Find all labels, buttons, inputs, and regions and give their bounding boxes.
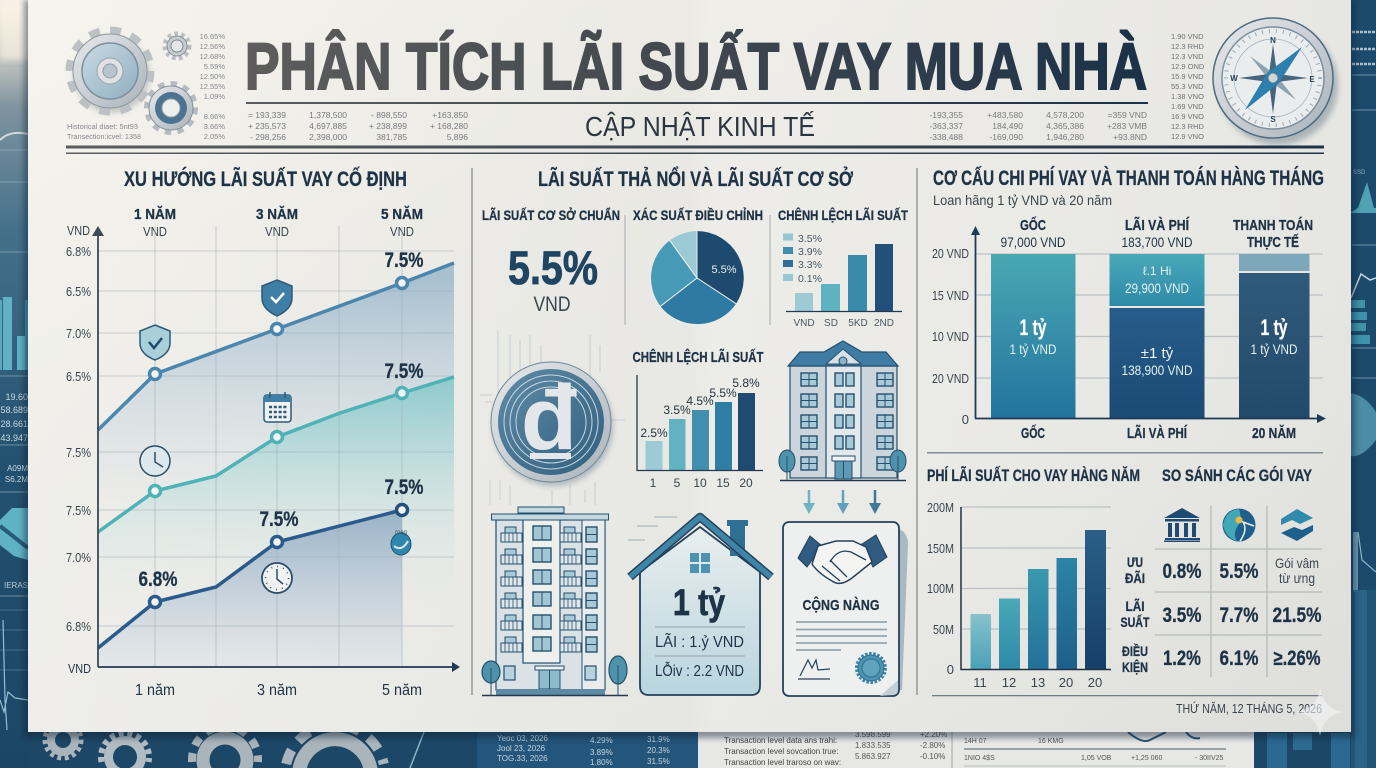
icon: shield dark (262, 280, 292, 316)
bottom strip: paper table: Transaction level traroso on wav: (724, 758, 841, 767)
values: ≥.26% (1274, 647, 1321, 670)
bar chart: 150M (927, 541, 954, 556)
right number table: 184,490 (992, 121, 1023, 131)
mini bar chart with legend: 3.9% (798, 246, 822, 258)
data labels: 6.8% (138, 568, 178, 591)
data labels: 7.5% (384, 476, 424, 499)
left number table: + 235,573 (248, 121, 286, 131)
bottom strip: paper table: 1,05 VOB (1081, 755, 1112, 762)
y axis labels: VND (68, 661, 91, 676)
panel: fixed rate trends (66, 167, 460, 699)
bottom strip: paper table: 1.833.535 (855, 741, 891, 750)
right strip decoration: SSD (1353, 170, 1366, 176)
left number table: 2,398,000 (309, 132, 347, 142)
panel: loan package comparison (1120, 466, 1322, 677)
bottom strip: paper table (698, 730, 1350, 768)
right number table: -193,355 (929, 110, 963, 120)
icon: clock (262, 563, 292, 593)
icon: compass: E (1309, 75, 1315, 84)
icon: handshake (798, 535, 887, 583)
bar chart: rate spread: 1 (650, 476, 657, 490)
bar chart: 200M (927, 500, 954, 515)
mini bar chart with legend: CHÊNH LỆCH LÃI SUẤT (778, 206, 908, 223)
stacked bar chart: GỐC (1021, 424, 1045, 442)
icon: S logo (1281, 509, 1313, 541)
bottom strip: dark table: 31.9% (647, 735, 670, 744)
values: từ ưng (1279, 570, 1315, 586)
row labels: KIỆN (1122, 658, 1148, 675)
bar chart: 12 (1002, 675, 1016, 690)
left number table: - 298,256 (250, 132, 286, 142)
left number table: - 898,550 (371, 110, 407, 120)
bottom strip: dark table: 4.29% (590, 736, 613, 745)
bar chart: rate spread: 4.5% (686, 394, 714, 408)
panel: loan cost structure (927, 167, 1326, 453)
row labels (1120, 554, 1150, 675)
values: 21.5% (1272, 604, 1322, 627)
stacked bar chart: LÃI VÀ PHÍ (1127, 424, 1188, 442)
term headers: 5 NĂM (381, 206, 423, 223)
stacked bar chart: 29,900 VND (1125, 280, 1189, 296)
row labels: SUẤT (1120, 614, 1150, 630)
y axis labels: 7.0% (66, 550, 91, 565)
bar chart: 11 (973, 675, 987, 690)
icon: house card: LỖiv : 2.2 VND (655, 662, 744, 680)
y axis labels: 7.5% (66, 445, 91, 460)
left mini statistics: 3.66% (204, 122, 225, 131)
base rate: VND (534, 293, 570, 316)
bottom strip: paper table: 5.863.927 (855, 752, 891, 761)
left number table: 4,697,885 (309, 121, 347, 131)
right number table: +93.8ND (1113, 132, 1147, 142)
values: 0.8% (1162, 560, 1202, 583)
icon: house card: 1 tỷ (673, 582, 725, 623)
left mini statistics: 1.09% (204, 92, 225, 101)
seal (857, 654, 885, 682)
left mini statistics (67, 32, 225, 141)
right mini statistics: 12.3 RHD (1171, 42, 1205, 51)
values: 5.5% (1220, 560, 1259, 583)
stacked bar chart: 20 VND (932, 371, 969, 386)
mini bar chart with legend (778, 206, 908, 329)
icon: round logo (1222, 508, 1256, 542)
bar chart: rate spread: 3.5% (663, 403, 691, 417)
bar chart: 50M (933, 622, 954, 637)
line chart (92, 226, 460, 672)
bottom strip: paper table: -0.10% (920, 752, 945, 761)
bottom strip: paper table: Transaction level data ans trahi: (724, 736, 837, 745)
right mini statistics: 16.9 VNO (1171, 112, 1204, 121)
bottom strip: dark table: 31.5% (647, 757, 670, 766)
right number table: +483,580 (987, 110, 1023, 120)
bar chart: rate spread: 2.5% (640, 426, 668, 440)
y axis labels: 6.5% (66, 369, 91, 384)
left number table (248, 110, 468, 142)
row labels: ƯU (1127, 554, 1143, 570)
stacked bar chart: THANH TOÁN (1233, 217, 1313, 234)
right mini statistics: 55.3 VND (1171, 82, 1204, 91)
stacked bar chart: 20 VND (932, 246, 969, 261)
bar chart: 13 (1031, 675, 1045, 690)
y axis labels: 7.5% (66, 503, 91, 518)
bar chart: 20 (1088, 675, 1102, 690)
background: dark financial data wall: S6.2M (5, 475, 28, 484)
right number table: +283 VMB (1107, 121, 1147, 131)
arrows into the document (803, 490, 881, 514)
data labels: 7.5% (260, 508, 299, 531)
background: dark financial data wall: 58.689 (0, 405, 28, 415)
stacked bar chart (932, 216, 1326, 442)
bar chart: rate spread: 10 (693, 476, 707, 490)
left mini statistics: 2.05% (204, 132, 225, 141)
right number table (929, 110, 1147, 142)
right mini statistics: 15.9 VND (1171, 72, 1204, 81)
y axis labels: 6.8% (66, 619, 91, 634)
bar chart: rate spread: 20 (739, 476, 753, 490)
bar chart: 20 (1059, 675, 1073, 690)
left number table: = 193,339 (248, 110, 286, 120)
right number table: 1,946,280 (1046, 132, 1084, 142)
bottom strip: paper table: 16 KMG (1038, 738, 1064, 745)
icon: shield light (140, 325, 170, 360)
row labels: ĐIỀU (1122, 643, 1148, 659)
stacked bar chart: LÃI VÀ PHÍ (1125, 216, 1190, 234)
bottom strip: paper table: +1,25 060 (1131, 755, 1162, 762)
icon: house card (628, 517, 771, 695)
icon: bank (1164, 508, 1200, 542)
stacked bar chart: 97,000 VND (1000, 234, 1066, 250)
mini bar chart with legend: 3.3% (798, 259, 822, 271)
bottom strip: paper table: 3.598.599 (855, 730, 891, 739)
background: dark financial data wall: 28.661 (0, 419, 28, 429)
right mini statistics: 1.90 VND (1171, 32, 1204, 41)
bar chart: rate spread: 5.8% (732, 376, 760, 390)
right number table: 4,365,386 (1046, 121, 1084, 131)
y axis labels (66, 223, 91, 676)
row labels: ĐÃI (1125, 569, 1145, 586)
bottom strip: dark table: Jool 23, 2026 (497, 744, 546, 753)
left number table: 1,378,500 (309, 110, 347, 120)
y axis labels: 6.5% (66, 284, 91, 299)
term headers (134, 206, 423, 239)
bar chart: rate spread: CHÊNH LỆCH LÃI SUẤT (632, 348, 764, 366)
bottom strip: dark table: 3.89% (590, 748, 613, 757)
right mini statistics: 1.38 VNO (1171, 92, 1204, 101)
stacked bar chart: 138,900 VND (1122, 362, 1192, 378)
values: 3.5% (1162, 604, 1202, 627)
bottom strip: paper table: 1NIO 4$S (964, 755, 995, 762)
left mini statistics: Transection:icvel: 1358 (67, 134, 141, 141)
heading: XU HƯỚNG LÃI SUẤT VAY CỐ ĐỊNH (124, 167, 407, 191)
left number table: + 168,280 (430, 121, 468, 131)
term headers: VND (143, 224, 167, 239)
right number table: -338,488 (929, 132, 963, 142)
icon: gears (71, 32, 195, 132)
icon: dong coin: đ (521, 367, 577, 469)
right strip decoration (1351, 0, 1376, 768)
left number table: + 238,899 (369, 121, 407, 131)
base rate: LÃI SUẤT CƠ SỞ CHUẨN (482, 206, 620, 223)
icon: sparkle (1296, 688, 1344, 736)
base rate (482, 206, 620, 316)
term headers: VND (390, 224, 414, 239)
icon: contract with handshake (783, 522, 908, 696)
mini bar chart with legend: 5KD (848, 318, 868, 329)
icon: dong coin (480, 330, 625, 505)
comparison table (1120, 506, 1322, 677)
icon: calendar (264, 392, 291, 422)
icon: compass (1213, 18, 1338, 145)
icon: small badge (391, 530, 411, 555)
term headers: VND (265, 224, 289, 239)
left number table: 5,896 (447, 132, 468, 142)
bottom strip: gears (45, 722, 384, 768)
mini bar chart with legend: 0.1% (798, 273, 822, 285)
x axis labels: 5 năm (382, 682, 422, 699)
data labels (138, 249, 424, 591)
stacked bar chart: 0 (962, 412, 969, 427)
icon: contract with handshake: CỘNG NÀNG (802, 596, 880, 614)
stacked bar chart: 20 NĂM (1252, 425, 1296, 442)
icon: apartment tower bottom (482, 507, 628, 696)
bar chart: rate spread (632, 348, 764, 490)
mini bar chart with legend: VND (793, 318, 815, 329)
left mini statistics: 12.55% (200, 82, 225, 91)
header (66, 18, 1338, 154)
bottom strip: dark table: Yeoc 03, 2026 (497, 734, 548, 743)
base rate: 5.5% (508, 241, 598, 294)
bottom strip: dark table (477, 732, 698, 768)
pie chart: XÁC SUẤT ĐIỀU CHỈNH (633, 207, 763, 223)
bar chart: rate spread: 5 (674, 476, 681, 490)
right mini statistics (1171, 32, 1205, 141)
data labels: 7.5% (384, 360, 424, 383)
right mini statistics: 12.3 VND (1171, 52, 1204, 61)
panel: annual interest cost (927, 465, 1140, 690)
left number table: +163,850 (432, 110, 468, 120)
stacked bar chart: 1 tỷ (1260, 315, 1288, 340)
icon: compass: S (1270, 115, 1276, 124)
right number table: =359 VND (1108, 110, 1147, 120)
background: dark financial data wall: 43.947 (0, 433, 28, 443)
left mini statistics: 12.68% (200, 52, 225, 61)
x axis labels: 3 năm (257, 682, 297, 699)
mini bar chart with legend: 3.5% (798, 233, 822, 245)
bottom strip: dark table: 1.80% (590, 758, 613, 767)
stacked bar chart: GỐC (1020, 216, 1046, 234)
bottom strip: paper table: Transaction level sovcation true: (724, 747, 838, 756)
values: 6.1% (1220, 647, 1259, 670)
x axis labels (135, 682, 422, 699)
right mini statistics: 12.9 VNO (1171, 132, 1204, 141)
bar chart: rate spread: 15 (716, 476, 730, 490)
date footer: THỨ NĂM, 12 THÁNG 5, 2026 (1176, 701, 1322, 716)
left mini statistics: 5.59% (204, 62, 225, 71)
row labels: LÃI (1126, 597, 1144, 614)
pie chart: 5.5% (711, 264, 737, 276)
left mini statistics: Historical diaet: 5nt93 (67, 124, 138, 131)
bottom strip: paper table: 14H 07 (964, 738, 987, 745)
heading: PHÍ LÃI SUẤT CHO VAY HÀNG NĂM (927, 465, 1140, 485)
signature (798, 660, 830, 679)
bar chart: 0 (947, 662, 954, 677)
right number table: 4,578,200 (1046, 110, 1084, 120)
icon: small badge: roeg (395, 530, 407, 536)
bottom strip: dark table: 20.3% (647, 746, 670, 755)
icon: compass: N (1270, 36, 1276, 45)
stacked bar chart: 1 tỷ VND (1250, 341, 1298, 357)
icon: apartment building top (779, 341, 906, 480)
stacked bar chart: 1 tỷ VND (1010, 341, 1056, 357)
mini bar chart with legend: SD (824, 318, 838, 329)
left mini statistics: 12.50% (200, 72, 225, 81)
x axis labels: 1 năm (135, 682, 175, 699)
y axis labels: 7.0% (66, 326, 91, 341)
values: 1.2% (1163, 647, 1201, 670)
bottom strip: dark table: TOG.33, 2026 (497, 754, 548, 763)
bar chart (927, 500, 1111, 690)
stacked bar chart: 183,700 VND (1122, 234, 1192, 250)
heading: SO SÁNH CÁC GÓI VAY (1162, 466, 1313, 485)
y axis labels: 6.8% (66, 244, 91, 259)
stacked bar chart: 1 tỷ (1020, 315, 1047, 340)
values: 7.7% (1220, 604, 1259, 627)
right number table: -169,090 (989, 132, 1023, 142)
icon: clock (140, 446, 170, 476)
background: dark financial data wall: IERAS (4, 581, 28, 590)
mini bar chart with legend: 2ND (874, 318, 894, 329)
subheading: Loan hãng 1 tỷ VND và 20 năm (933, 192, 1112, 208)
bottom strip: paper table: -2.80% (920, 741, 945, 750)
stacked bar chart: ±1 tỷ (1141, 345, 1174, 362)
stacked bar chart: ℓ.1 Hi (1143, 264, 1171, 278)
left mini statistics: 12.56% (200, 42, 225, 51)
panel: floating and base rates (480, 167, 908, 696)
right mini statistics: 12.3 RHD (1171, 122, 1205, 131)
bar chart: 100M (927, 581, 954, 596)
data labels: 7.5% (384, 249, 424, 272)
left mini statistics: 8.66% (204, 112, 225, 121)
icon: house card: LÃI : 1.ỷ VND (655, 634, 744, 651)
values: Gói vâm (1275, 555, 1319, 571)
background: dark financial data wall: 19.60 (5, 392, 28, 402)
stacked bar chart: 15 VND (932, 288, 969, 303)
heading: LÃI SUẤT THẢ NỔI VÀ LÃI SUẤT CƠ SỞ (538, 167, 853, 191)
icon: compass: W (1230, 74, 1238, 83)
right number table: -363,337 (929, 121, 963, 131)
right mini statistics: 1.69 VND (1171, 102, 1204, 111)
background: dark financial data wall: A09M (7, 464, 28, 473)
pie chart (633, 207, 763, 325)
left mini statistics: 16.65% (200, 32, 225, 41)
subtitle: CẬP NHẬT KINH TẾ (585, 111, 815, 142)
values (1162, 555, 1322, 670)
bar chart: rate spread: 5.5% (709, 386, 737, 400)
stacked bar chart: 10 VND (932, 329, 969, 344)
title: PHÂN TÍCH LÃI SUẤT VAY MUA NHÀ (245, 29, 1147, 103)
bottom strip: paper table: +2.20% (920, 730, 947, 739)
right mini statistics: 12.9 OND (1171, 62, 1205, 71)
stacked bar chart: THỰC TẾ (1247, 234, 1299, 251)
term headers: 1 NĂM (134, 206, 176, 223)
bottom strip: paper table: - 30IIV25 (1195, 755, 1224, 762)
left number table: 381,785 (376, 132, 407, 142)
term headers: 3 NĂM (256, 206, 298, 223)
y axis labels: VND (67, 223, 90, 238)
